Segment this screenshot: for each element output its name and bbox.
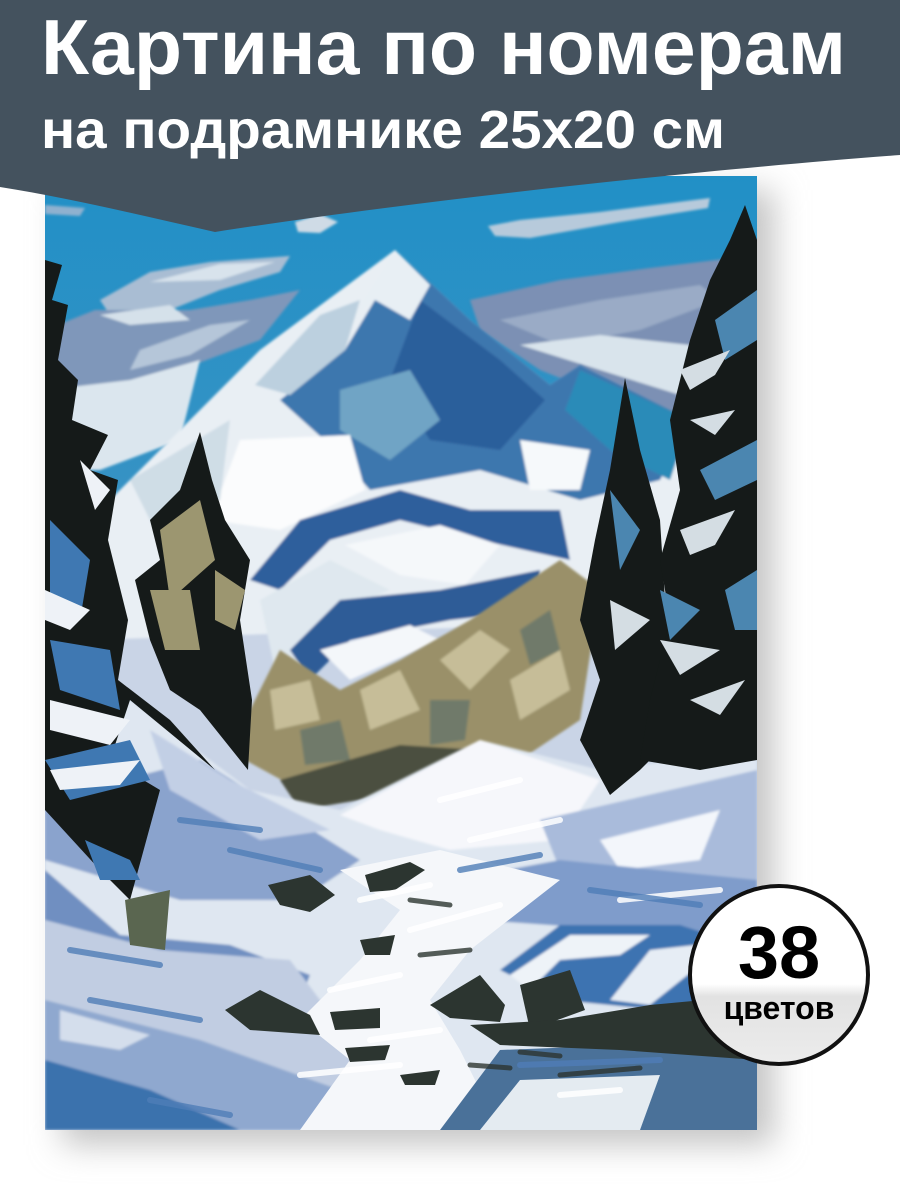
- stream: [300, 850, 560, 1130]
- sky: [45, 176, 757, 498]
- title: Картина по номерам: [41, 3, 846, 91]
- right evergreens: [580, 205, 757, 795]
- painting: snowy mountain landscape: [45, 176, 757, 1130]
- lower snow field: [45, 700, 757, 1130]
- badge label: цветов: [724, 990, 834, 1026]
- left evergreens: [45, 260, 252, 900]
- clouds: [45, 198, 757, 470]
- mountain: [90, 250, 690, 680]
- badge number: 38: [738, 911, 820, 994]
- rocks: [225, 862, 757, 1085]
- snow brush strokes: [70, 780, 720, 1115]
- header banner: [0, 0, 900, 232]
- subtitle: на подрамнике 25х20 см: [41, 100, 725, 160]
- badge: 38 colours: [690, 886, 868, 1064]
- canvas shadow: [62, 190, 774, 1145]
- golden trees: [245, 560, 600, 810]
- painting base: [45, 627, 757, 1130]
